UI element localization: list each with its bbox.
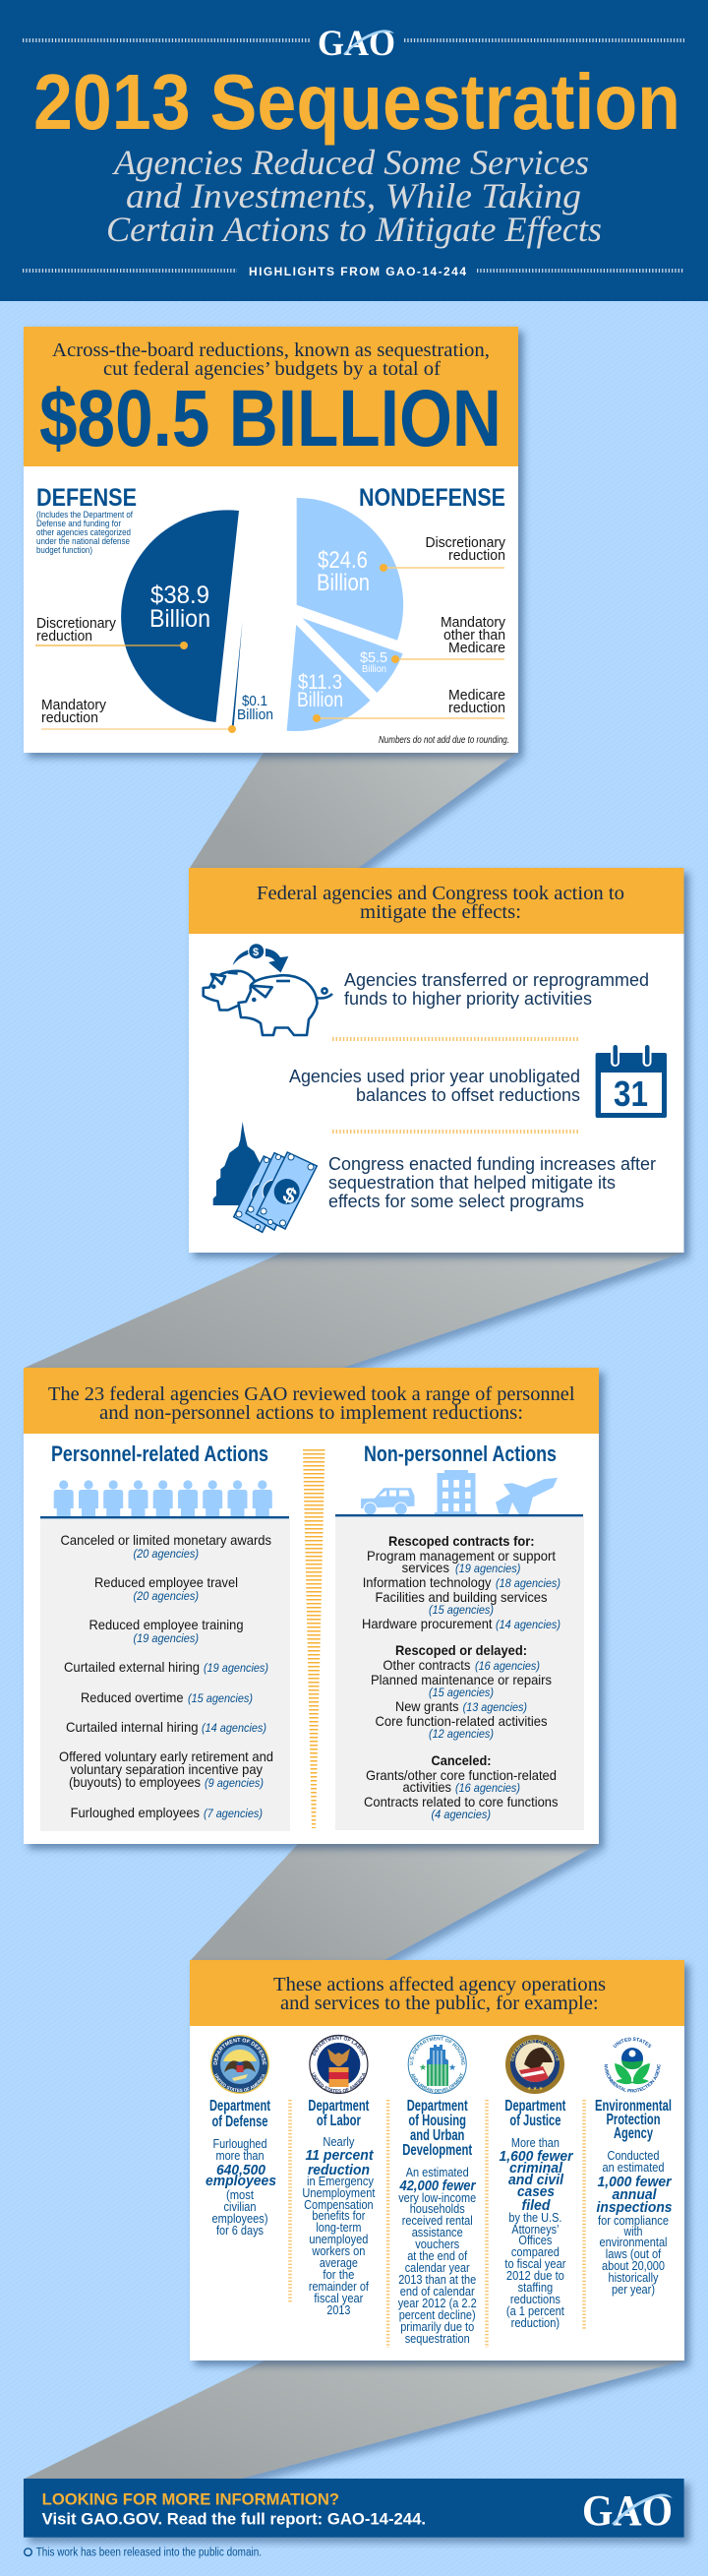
column: housing (398, 2098, 477, 2346)
column: labor: 11 percent (305, 2148, 375, 2164)
list box: non-personnel: (13 agencies) (463, 1700, 527, 1714)
icon: capitol and money (213, 1122, 317, 1232)
column: EPA: for compliance (598, 2214, 669, 2228)
panel heading (48, 1383, 575, 1424)
list box: non-personnel: Rescoped contracts for: (388, 1533, 535, 1549)
icon: office building (435, 1470, 477, 1515)
column: justice: More than (511, 2136, 560, 2150)
pie: defense: Billion (237, 706, 273, 723)
column: housing: An estimated (406, 2166, 469, 2179)
pie labels: reduction (41, 709, 98, 726)
list box: personnel: (15 agencies) (188, 1691, 253, 1705)
list box: personnel: Curtailed internal hiring (66, 1719, 199, 1735)
pie: nondefense: $5.5 (360, 649, 387, 666)
column: justice: (a 1 percent (506, 2304, 564, 2318)
list box: personnel: (14 agencies) (202, 1721, 266, 1735)
text: unobligated balances: Agencies used prior year unobligated (289, 1067, 580, 1086)
list box: non-personnel: (16 agencies) (455, 1781, 520, 1795)
pie labels: reduction (36, 628, 92, 644)
panel heading: mitigate the effects: (360, 901, 521, 923)
total figure: $80.5 BILLION (39, 374, 502, 463)
seal: department of justice: ★ ★ ★ (527, 2086, 544, 2092)
column: defense: (most (226, 2188, 254, 2202)
column: labor: reduction (308, 2163, 370, 2178)
column: housing: sequestration (405, 2332, 470, 2346)
column: EPA: inspections (596, 2200, 673, 2216)
list box: non-personnel (335, 1514, 584, 1830)
seal: department of labor: UNITED STATES OF AMERICA (312, 2072, 366, 2093)
column: housing: vouchers (415, 2238, 459, 2251)
connector: panel 4 to footer (25, 2361, 690, 2484)
connector: panel 3 to 4 (191, 1844, 604, 1966)
column: housing: Department (407, 2098, 468, 2115)
column: labor: Compensation (304, 2198, 374, 2212)
pie: nondefense: Billion (297, 689, 343, 711)
defense note: Defense and funding for (36, 519, 121, 529)
list box: non-personnel: (16 agencies) (475, 1659, 540, 1673)
list box: non-personnel: Information technology (363, 1574, 492, 1590)
icon: calendar: 31 (614, 1073, 648, 1114)
list box: personnel: Reduced employee travel (94, 1574, 238, 1590)
column: labor: long-term (316, 2221, 361, 2235)
list box: non-personnel: Facilities and building services (376, 1589, 547, 1605)
column: EPA: about 20,000 (602, 2259, 665, 2273)
column: labor: fiscal year (314, 2292, 363, 2305)
column: EPA: an estimated (602, 2161, 665, 2175)
column: labor: average (320, 2256, 358, 2270)
defense note (36, 510, 133, 556)
intro text (52, 339, 490, 380)
seal: department of labor (309, 2035, 368, 2094)
list box: non-personnel: Core function-related activities (376, 1713, 547, 1729)
column: EPA: Protection (606, 2112, 661, 2128)
seal: department of justice: DEPARTMENT OF JUSTICE (510, 2039, 560, 2061)
pie labels: Mandatory (441, 614, 505, 631)
column: housing: year 2012 (a 2.2 (398, 2297, 477, 2310)
list box: non-personnel: Grants/other core function-related (366, 1767, 557, 1783)
GAO logo: GAO (318, 24, 395, 64)
list box: personnel: (20 agencies) (134, 1547, 199, 1561)
report link text: Visit GAO.GOV. Read the full report: GAO-14-244. (42, 2511, 426, 2529)
panel heading: and non-personnel actions to implement reductions: (99, 1402, 523, 1424)
column: defense: of Defense (212, 2114, 268, 2130)
column: labor (302, 2098, 376, 2317)
column: EPA: historically (608, 2271, 659, 2285)
column: EPA: Environmental (595, 2098, 672, 2115)
column: labor: for the (323, 2268, 354, 2282)
column: EPA: laws (out of (606, 2247, 662, 2261)
list box: non-personnel: (4 agencies) (431, 1808, 491, 1821)
pie labels: Medicare (448, 687, 505, 704)
column: labor: benefits for (312, 2209, 365, 2223)
column: justice: compared (511, 2245, 560, 2259)
panel heading: and services to the public, for example: (280, 1993, 599, 2014)
seal: department of defense: DEPARTMENT OF DEFENSE (213, 2038, 266, 2064)
panel heading (273, 1974, 606, 2014)
pie labels: Medicare (448, 640, 505, 656)
list box: non-personnel: (19 agencies) (455, 1562, 520, 1575)
subtitle: and Investments, While Taking (126, 176, 581, 215)
list box: personnel: Curtailed external hiring (64, 1659, 200, 1675)
panel heading: Federal agencies and Congress took action to (257, 883, 624, 904)
list box: personnel: (buyouts) to employees (69, 1774, 201, 1790)
list box: non-personnel: activities (403, 1779, 451, 1795)
column: labor: of Labor (317, 2113, 361, 2129)
heading: non-personnel actions: Non-personnel Actions (364, 1441, 557, 1466)
pie labels: other than (443, 627, 505, 644)
text: unobligated balances (289, 1067, 580, 1105)
column: labor: Unemployment (302, 2186, 376, 2200)
pie: nondefense: Billion (317, 570, 370, 596)
list box: non-personnel: Planned maintenance or repairs (371, 1672, 552, 1687)
column: justice: by the U.S. (508, 2211, 561, 2225)
list box: non-personnel: (12 agencies) (429, 1727, 494, 1741)
list box: personnel (40, 1516, 290, 1831)
text: funding increases: effects for some select programs (328, 1192, 584, 1211)
list box: non-personnel: Canceled: (431, 1752, 492, 1768)
pie labels: Mandatory (41, 697, 106, 713)
text: transferred funds (344, 970, 649, 1009)
public domain note: This work has been released into the public domain. (36, 2547, 262, 2559)
list box: personnel: Furloughed employees (71, 1805, 200, 1820)
list box: personnel: (19 agencies) (204, 1661, 268, 1675)
defense note: budget function) (36, 545, 92, 556)
column: labor: in Emergency (307, 2175, 375, 2188)
seal: department of justice (505, 2035, 564, 2094)
panel: budget reductions (24, 327, 523, 758)
column: justice: staffing (518, 2281, 553, 2295)
column: housing: of Housing (408, 2113, 466, 2129)
heading: personnel actions: Personnel-related Actions (51, 1441, 268, 1466)
intro text: cut federal agencies’ budgets by a total of (103, 358, 441, 380)
column: housing: primarily due to (400, 2320, 474, 2334)
seal: department of labor: DEPARTMENT OF LABOR (312, 2036, 366, 2056)
column: housing: calendar year (405, 2261, 470, 2275)
list box: non-personnel: Rescoped or delayed: (395, 1642, 527, 1658)
column: EPA: 1,000 fewer (598, 2175, 673, 2190)
list box: personnel: (20 agencies) (134, 1589, 199, 1603)
column: defense: employees (206, 2174, 276, 2189)
column: EPA (595, 2098, 673, 2297)
column: defense: civilian (224, 2200, 257, 2214)
column: defense: employees) (212, 2212, 267, 2226)
seal: housing and urban development: U.S. DEPARTMENT OF HOUSING (409, 2037, 465, 2064)
list box: personnel: Canceled or limited monetary awards (61, 1532, 271, 1548)
icon: airplane (496, 1478, 558, 1514)
column: housing: received rental (402, 2214, 473, 2228)
text: unobligated balances: balances to offset reductions (356, 1085, 580, 1105)
rounding note: Numbers do not add due to rounding. (379, 735, 509, 746)
column: justice: Offices (518, 2234, 552, 2247)
seal: environmental protection agency: UNITED STATES (613, 2037, 651, 2048)
seal: housing and urban development: ★ (448, 2062, 456, 2072)
pie labels: reduction (448, 547, 505, 564)
icon: piggy banks: $ (253, 947, 259, 958)
icon: car (361, 1488, 415, 1515)
panel heading: The 23 federal agencies GAO reviewed took a range of personnel (48, 1383, 575, 1405)
pie: nondefense: $24.6 (318, 547, 368, 574)
column: EPA: Agency (614, 2125, 653, 2142)
panel heading: These actions affected agency operations (273, 1974, 606, 1995)
connector: panel 2 to 3 (25, 1253, 689, 1374)
text: transferred funds: funds to higher priority activities (344, 989, 592, 1009)
column: labor: Nearly (323, 2135, 355, 2149)
defense note: other agencies categorized (36, 527, 131, 538)
list box: personnel: Reduced overtime (81, 1689, 184, 1705)
seal: housing and urban development (407, 2035, 467, 2094)
column: justice: Attorneys’ (511, 2223, 559, 2237)
text: funding increases (328, 1154, 656, 1211)
pie labels: Discretionary (36, 615, 116, 632)
list box: non-personnel: (15 agencies) (429, 1603, 494, 1617)
column: justice: and civil (508, 2173, 564, 2188)
pie: defense: $0.1 (242, 693, 267, 709)
seal: housing and urban development: AND URBAN DEVELOPMENT (411, 2072, 464, 2093)
pie labels: reduction (448, 700, 505, 716)
seal: environmental protection agency: ENVIRONMENTAL PROTECTION AGENCY (604, 2064, 661, 2092)
column: EPA: per year) (612, 2283, 655, 2297)
list box: non-personnel: Other contracts (383, 1657, 470, 1673)
pie: defense: Billion (149, 605, 210, 633)
column: labor: Department (308, 2098, 369, 2115)
column: EPA: Conducted (608, 2149, 660, 2163)
column: justice: cases (517, 2184, 555, 2200)
list box: non-personnel: (15 agencies) (429, 1686, 494, 1699)
column: housing: and Urban (410, 2127, 464, 2144)
list box: non-personnel: Contracts related to core functions (364, 1794, 559, 1809)
column: justice (500, 2098, 574, 2330)
list box: non-personnel: Hardware procurement (362, 1616, 493, 1631)
column: justice: 2012 due to (506, 2269, 564, 2283)
subtitle: Certain Actions to Mitigate Effects (106, 210, 602, 249)
column: EPA: with (623, 2225, 643, 2239)
list box: non-personnel: Program management or support (367, 1548, 556, 1564)
column: housing: end of calendar (400, 2285, 475, 2299)
pie labels: Discretionary (425, 534, 505, 551)
highlights line: HIGHLIGHTS FROM GAO-14-244 (249, 265, 466, 278)
column: justice: to fiscal year (504, 2257, 565, 2271)
column: justice: of Justice (509, 2113, 561, 2129)
column: defense (206, 2098, 276, 2238)
defense note: under the national defense (36, 536, 130, 547)
column: labor: remainder of (309, 2280, 369, 2294)
subtitle (106, 143, 602, 249)
column: EPA: annual (612, 2187, 657, 2203)
column: defense: more than (216, 2149, 265, 2163)
panel: mitigation (189, 868, 688, 1257)
text: funding increases: sequestration that helped mitigate its (328, 1173, 616, 1193)
icon: piggy banks (204, 944, 332, 1035)
list box: non-personnel: New grants (395, 1698, 458, 1714)
column: defense: Furloughed (212, 2137, 267, 2151)
pie: nondefense (287, 498, 403, 731)
panel: agency actions (24, 1368, 604, 1849)
pie: nondefense: $11.3 (298, 671, 342, 694)
leader lines (35, 564, 504, 733)
column: housing: assistance (412, 2226, 463, 2239)
pie: defense (121, 510, 273, 729)
GAO logo: GAO (582, 2486, 673, 2535)
panel heading (257, 883, 624, 923)
connector: panel 1 to 2 (190, 753, 523, 874)
column: justice: reduction) (511, 2316, 560, 2330)
seal: department of defense (210, 2035, 269, 2094)
list box: personnel: (19 agencies) (134, 1631, 199, 1645)
column: housing: Development (402, 2142, 472, 2159)
list box: personnel: Offered voluntary early retirement and (59, 1748, 273, 1764)
column: justice: reductions (510, 2293, 560, 2306)
more information heading: LOOKING FOR MORE INFORMATION? (42, 2491, 339, 2509)
column: labor: workers on (312, 2244, 365, 2258)
column: housing: 42,000 fewer (399, 2178, 477, 2194)
text: funding increases: Congress enacted funding increases after (328, 1154, 656, 1174)
column: labor: 2013 (326, 2303, 350, 2317)
column: defense: 640,500 (216, 2163, 266, 2178)
column: labor: unemployed (309, 2233, 368, 2246)
intro text: Across-the-board reductions, known as sequestration, (52, 339, 490, 361)
seal: environmental protection agency (604, 2037, 661, 2092)
seal: housing and urban development: ★ (419, 2062, 427, 2072)
column: defense: Department (209, 2098, 270, 2115)
column: EPA: environmental (600, 2236, 667, 2249)
column: justice: criminal (509, 2161, 563, 2177)
column: defense: for 6 days (216, 2224, 264, 2238)
list box: personnel: (9 agencies) (205, 1776, 264, 1790)
icon: capitol and money: $ (279, 1182, 301, 1209)
seal: department of defense: UNITED STATES OF AMERICA (214, 2073, 266, 2092)
list box: non-personnel: (14 agencies) (496, 1618, 560, 1631)
defense note: (Includes the Department of (36, 510, 133, 521)
pie: nondefense: Billion (362, 664, 386, 675)
column: justice: 1,600 fewer (500, 2149, 574, 2165)
heading: nondefense: NONDEFENSE (359, 484, 505, 512)
pie labels (36, 534, 505, 726)
pie: defense: $38.9 (150, 582, 209, 609)
header banner (0, 0, 708, 301)
tapered stripe divider (303, 1449, 324, 1828)
column: housing: percent decline) (399, 2308, 476, 2322)
list box: personnel: Reduced employee training (88, 1617, 244, 1632)
column: housing: households (410, 2202, 465, 2216)
icon: row of people (54, 1480, 272, 1516)
list box: non-personnel: services (402, 1560, 449, 1575)
heading: defense: DEFENSE (36, 484, 137, 512)
column: housing: at the end of (407, 2249, 468, 2263)
text: transferred funds: Agencies transferred or reprogrammed (344, 970, 649, 990)
column: justice: filed (521, 2198, 552, 2214)
column: housing: 2013 than at the (398, 2273, 476, 2287)
list box: personnel: voluntary separation incentive pay (71, 1761, 263, 1777)
column: justice: Department (504, 2098, 565, 2115)
column: housing: very low-income (398, 2191, 476, 2205)
footer banner (24, 2479, 689, 2543)
subtitle: Agencies Reduced Some Services (112, 143, 589, 182)
list box: personnel: (7 agencies) (204, 1807, 263, 1820)
icon: calendar (596, 1045, 667, 1118)
list box: non-personnel: (18 agencies) (496, 1576, 560, 1590)
